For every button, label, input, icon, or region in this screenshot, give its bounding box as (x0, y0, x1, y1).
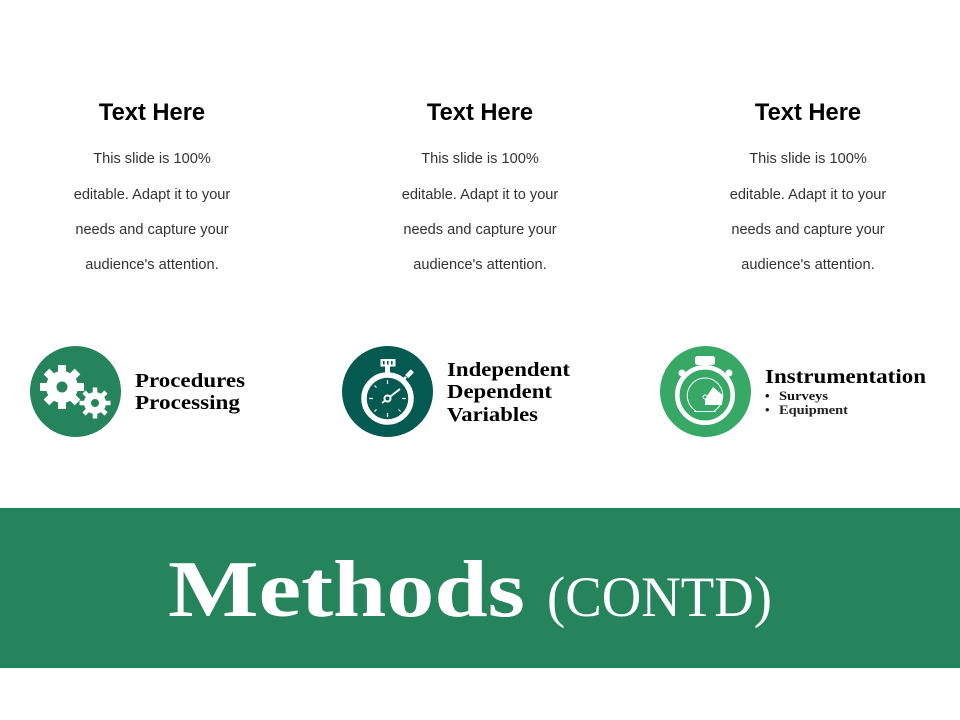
label: procedures processing: Procedures (135, 371, 245, 392)
label: independent dependent variables: Variables (447, 405, 538, 426)
label: independent dependent variables: Dependent (447, 382, 553, 403)
column 2 body text: audience's attention. (413, 257, 547, 273)
column 2 body text: editable. Adapt it to your (402, 187, 558, 203)
label: independent dependent variables (447, 360, 571, 426)
column 1: text block (74, 100, 230, 273)
icon: stopwatch (342, 346, 433, 437)
label: instrumentation (765, 367, 926, 417)
column 1 heading: Text Here (99, 100, 205, 126)
icon: gears (30, 346, 121, 437)
column 3 body text (730, 151, 886, 273)
column 1 body text: This slide is 100% (93, 151, 211, 167)
column 3 body text: needs and capture your (731, 222, 885, 238)
column 3 body text: audience's attention. (741, 257, 875, 273)
title banner (0, 508, 960, 668)
label: independent dependent variables: Independent (447, 360, 571, 381)
instrumentation bullet list: Surveys (779, 388, 828, 403)
instrumentation bullet list: • (765, 388, 770, 403)
title (168, 544, 772, 634)
column 2: text block (402, 100, 558, 273)
label: procedures processing: Processing (135, 393, 240, 414)
title: (CONTD) (547, 566, 772, 629)
column 3 heading: Text Here (755, 100, 861, 126)
instrumentation heading: Instrumentation (765, 367, 926, 388)
column 1 body text: audience's attention. (85, 257, 219, 273)
column 3 body text: This slide is 100% (749, 151, 867, 167)
icon: stopwatch with gauge (660, 346, 751, 437)
column 2 body text: This slide is 100% (421, 151, 539, 167)
column 2 heading: Text Here (427, 100, 533, 126)
label: procedures processing (135, 371, 245, 414)
instrumentation bullet list: Equipment (779, 402, 849, 417)
title: Methods (168, 544, 525, 634)
instrumentation bullet list (765, 388, 849, 417)
column 2 body text: needs and capture your (403, 222, 557, 238)
column 1 body text (74, 151, 230, 273)
column 1 body text: needs and capture your (75, 222, 229, 238)
column 1 body text: editable. Adapt it to your (74, 187, 230, 203)
column 3: text block (730, 100, 886, 273)
column 2 body text (402, 151, 558, 273)
instrumentation bullet list: • (765, 402, 770, 417)
column 3 body text: editable. Adapt it to your (730, 187, 886, 203)
